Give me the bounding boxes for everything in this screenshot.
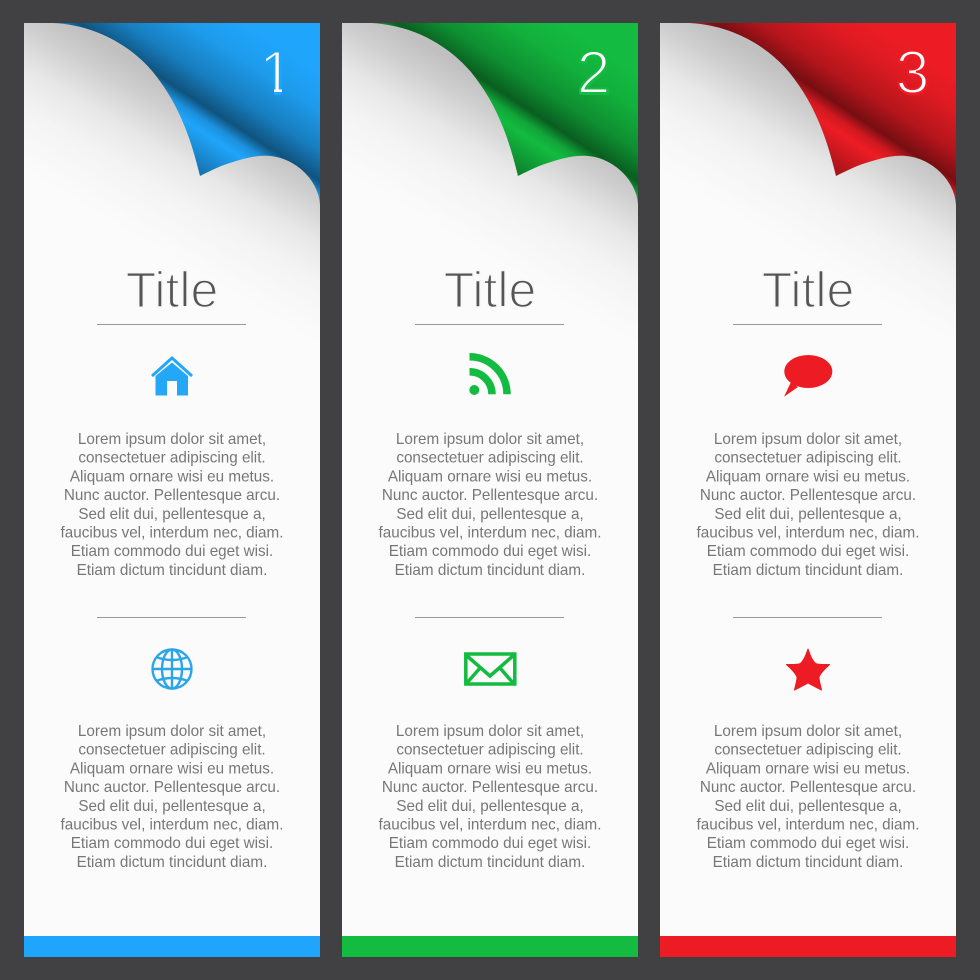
text block: Sed elit dui, pellentesque a, [78, 798, 266, 815]
text block: faucibus vel, interdum nec, diam. [61, 524, 283, 542]
bottom bar [660, 936, 956, 957]
text block: Etiam commodo dui eget wisi. [71, 543, 273, 560]
text block: consectetuer adipiscing elit. [78, 742, 266, 759]
text block: Aliquam ornare wisi eu metus. [388, 760, 592, 777]
panel: column 1 [24, 23, 320, 957]
text block: Sed elit dui, pellentesque a, [396, 506, 584, 523]
text block: Lorem ipsum dolor sit amet, [78, 723, 266, 740]
text block: Sed elit dui, pellentesque a, [396, 798, 584, 815]
number 3: 3 [897, 40, 930, 107]
text block: faucibus vel, interdum nec, diam. [697, 816, 919, 834]
text block: Lorem ipsum dolor sit amet, [714, 723, 902, 740]
icon: speech bubble [784, 355, 832, 397]
text block: Etiam dictum tincidunt diam. [395, 562, 585, 579]
icon: rss [469, 357, 507, 395]
text block: Aliquam ornare wisi eu metus. [70, 760, 274, 777]
text block: faucibus vel, interdum nec, diam. [379, 524, 601, 542]
text block: faucibus vel, interdum nec, diam. [379, 816, 601, 834]
panel: column 2 [342, 23, 638, 957]
text block: Nunc auctor. Pellentesque arcu. [700, 779, 916, 796]
text block: Etiam commodo dui eget wisi. [707, 835, 909, 852]
text block: consectetuer adipiscing elit. [78, 450, 266, 467]
text block: Etiam dictum tincidunt diam. [713, 854, 903, 871]
title: Title [762, 262, 854, 318]
curled paper sheet [660, 23, 956, 936]
text block: Etiam commodo dui eget wisi. [389, 835, 591, 852]
icon: star [786, 649, 830, 690]
text block: Etiam dictum tincidunt diam. [713, 562, 903, 579]
number 2: 2 [577, 39, 610, 106]
text block: Sed elit dui, pellentesque a, [714, 506, 902, 523]
text block: Aliquam ornare wisi eu metus. [70, 468, 274, 485]
text block: Nunc auctor. Pellentesque arcu. [382, 487, 598, 504]
number 2: 2 [578, 40, 611, 107]
text block: Lorem ipsum dolor sit amet, [396, 431, 584, 448]
text block: Lorem ipsum dolor sit amet, [78, 431, 266, 448]
panel: column 3 [660, 23, 956, 957]
number 3: 3 [896, 39, 929, 106]
text block: consectetuer adipiscing elit. [714, 450, 902, 467]
icon: envelope [466, 654, 515, 684]
bottom bar [342, 936, 638, 957]
icon: house [152, 358, 192, 396]
text block: Nunc auctor. Pellentesque arcu. [64, 779, 280, 796]
text block: Etiam dictum tincidunt diam. [395, 854, 585, 871]
text block: consectetuer adipiscing elit. [396, 450, 584, 467]
bottom bar [24, 936, 320, 957]
text block: consectetuer adipiscing elit. [396, 742, 584, 759]
text block: Lorem ipsum dolor sit amet, [714, 431, 902, 448]
colored corner: blue [24, 23, 320, 223]
curled paper sheet [342, 23, 638, 936]
text block: Sed elit dui, pellentesque a, [78, 506, 266, 523]
text block: Nunc auctor. Pellentesque arcu. [382, 779, 598, 796]
text block: Etiam commodo dui eget wisi. [707, 543, 909, 560]
title: Title [126, 262, 218, 318]
title: Title [444, 262, 536, 318]
number 1: 1 [260, 40, 294, 107]
text block: faucibus vel, interdum nec, diam. [61, 816, 283, 834]
text block: Nunc auctor. Pellentesque arcu. [700, 487, 916, 504]
text block: Etiam commodo dui eget wisi. [389, 543, 591, 560]
text block: Sed elit dui, pellentesque a, [714, 798, 902, 815]
curled paper sheet [24, 23, 320, 936]
number 1 [266, 52, 282, 95]
number 1: 1 [259, 39, 293, 106]
text block: Aliquam ornare wisi eu metus. [706, 760, 910, 777]
text block: faucibus vel, interdum nec, diam. [697, 524, 919, 542]
colored corner: red [660, 23, 956, 223]
text block: Etiam commodo dui eget wisi. [71, 835, 273, 852]
icon: globe [152, 649, 192, 689]
text block: Etiam dictum tincidunt diam. [77, 562, 267, 579]
text block: Aliquam ornare wisi eu metus. [706, 468, 910, 485]
text block: Etiam dictum tincidunt diam. [77, 854, 267, 871]
colored corner: green [342, 23, 638, 223]
text block: Lorem ipsum dolor sit amet, [396, 723, 584, 740]
text block: Aliquam ornare wisi eu metus. [388, 468, 592, 485]
text block: Nunc auctor. Pellentesque arcu. [64, 487, 280, 504]
text block: consectetuer adipiscing elit. [714, 742, 902, 759]
